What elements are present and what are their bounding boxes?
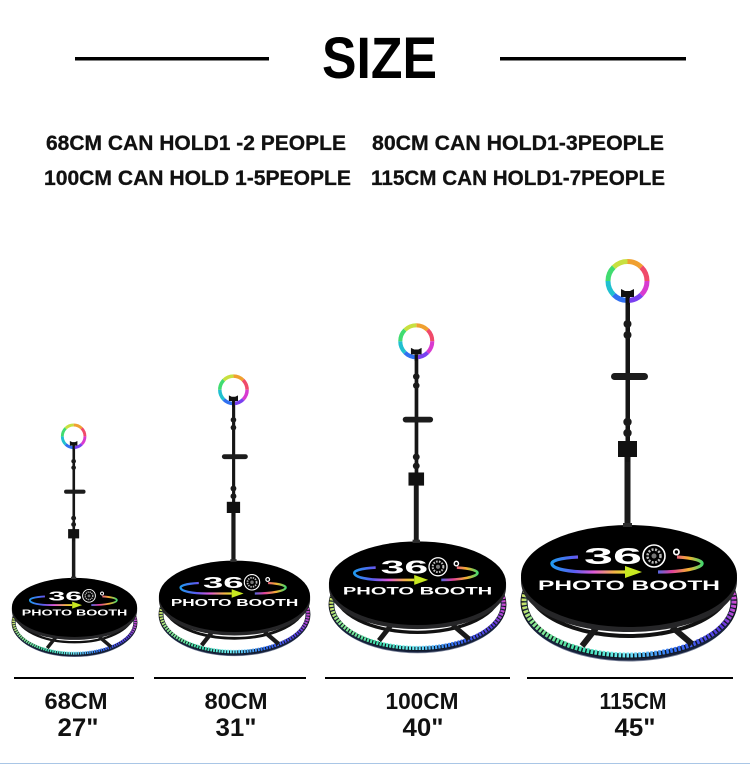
size label: 80cm bbox=[154, 677, 306, 742]
size label: 68cm bbox=[14, 677, 134, 742]
size label: 100cm: 40" bbox=[402, 714, 444, 742]
capacity 100cm: 100CM CAN HOLD 1-5PEOPLE bbox=[44, 167, 351, 190]
size label: 68cm: 27" bbox=[58, 714, 98, 742]
text block: capacity by size bbox=[44, 132, 665, 190]
product: 115cm photo booth: PHOTO BOOTH bbox=[538, 577, 720, 593]
product: 68cm photo booth bbox=[12, 425, 137, 656]
title rule left bbox=[75, 57, 269, 60]
size label: 100cm: 100CM bbox=[386, 688, 458, 714]
product: 100cm photo booth: ° bbox=[453, 557, 460, 577]
product: 100cm photo booth: 36 bbox=[381, 556, 428, 577]
capacity 68cm: 68CM CAN HOLD1 -2 PEOPLE bbox=[46, 132, 346, 155]
product: 115cm photo booth: 36 bbox=[584, 543, 642, 569]
product: 100cm photo booth bbox=[329, 325, 506, 652]
product: 100cm photo booth: PHOTO BOOTH bbox=[343, 586, 492, 598]
size label: 80cm: 80CM bbox=[204, 688, 268, 714]
size label: 100cm bbox=[325, 677, 510, 742]
product: 68cm photo booth: 36 bbox=[48, 588, 82, 603]
product: 115cm photo booth bbox=[521, 262, 737, 660]
title: SIZE bbox=[75, 26, 686, 91]
product: 80cm photo booth: ° bbox=[265, 575, 271, 592]
product: 80cm photo booth: 36 bbox=[203, 574, 244, 592]
size label: 115cm bbox=[527, 677, 733, 742]
product: 68cm photo booth: PHOTO BOOTH bbox=[22, 609, 128, 618]
size label: 115cm: 115CM bbox=[600, 688, 666, 714]
title text: SIZE bbox=[322, 26, 437, 91]
size label: 115cm: 45" bbox=[614, 714, 656, 742]
title rule right bbox=[500, 57, 686, 60]
product: 80cm photo booth bbox=[159, 376, 310, 655]
capacity 115cm: 115CM CAN HOLD1-7PEOPLE bbox=[371, 167, 665, 190]
size label: 68cm: 68CM bbox=[44, 688, 108, 714]
size label: 80cm: 31" bbox=[216, 714, 256, 742]
capacity 80cm: 80CM CAN HOLD1-3PEOPLE bbox=[372, 132, 664, 155]
product: 80cm photo booth: PHOTO BOOTH bbox=[171, 598, 298, 609]
product: 68cm photo booth: ° bbox=[99, 588, 105, 603]
product: 115cm photo booth: ° bbox=[672, 544, 681, 569]
